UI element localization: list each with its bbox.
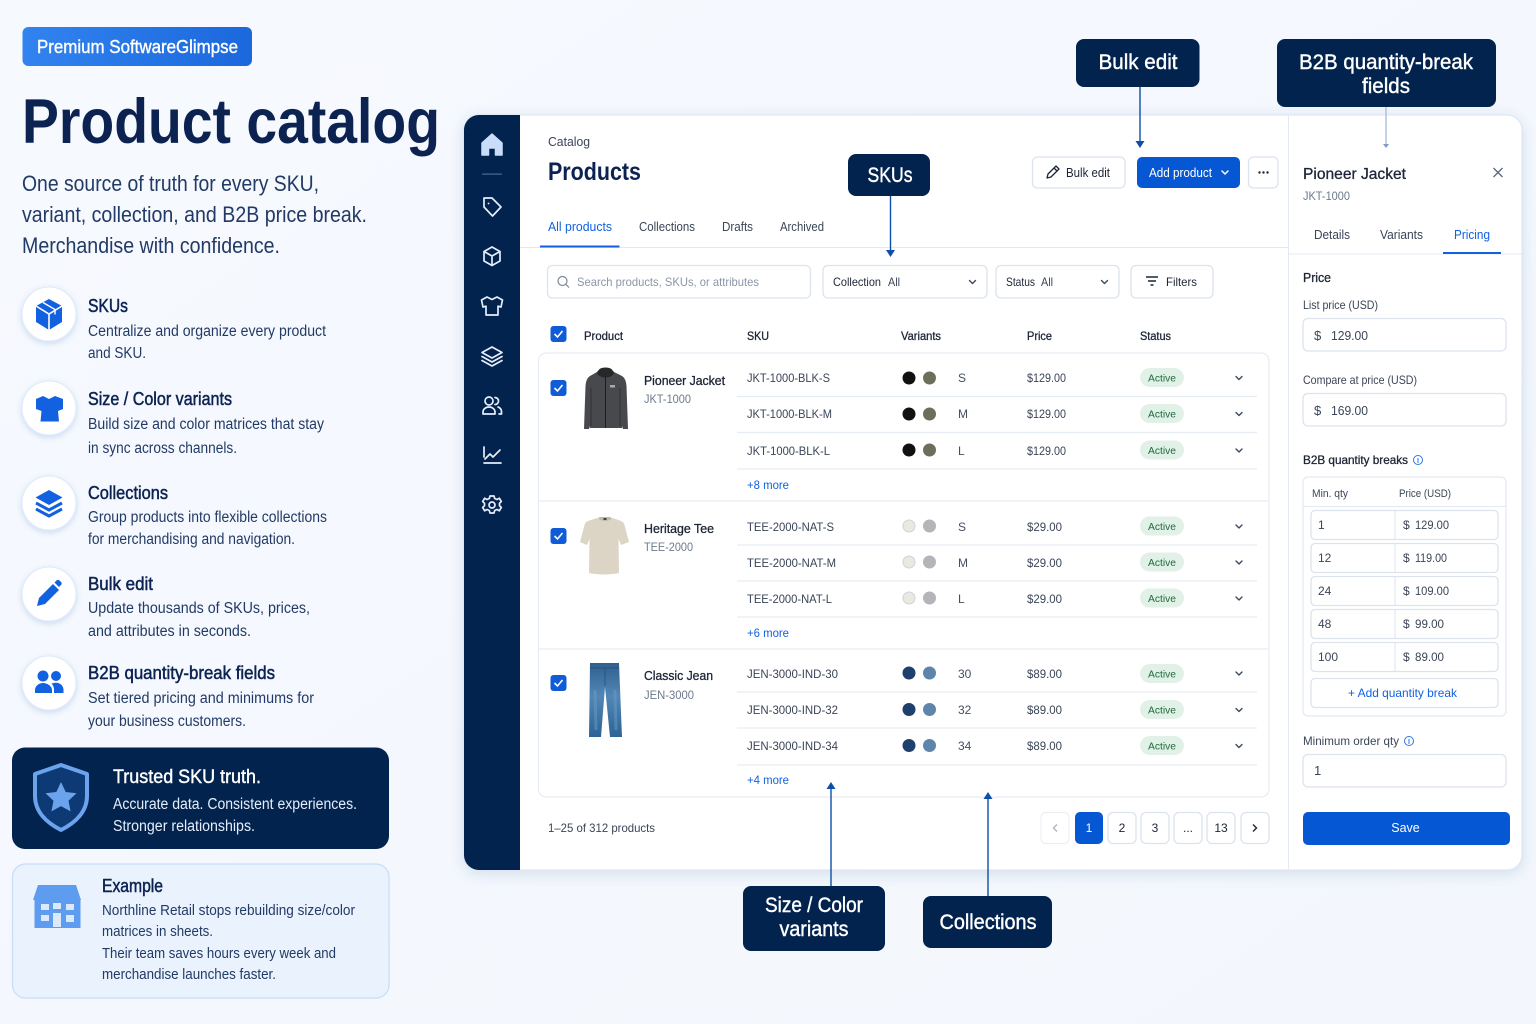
product: Pioneer Jacket: JKT-1000 (644, 392, 691, 406)
icon: shield (35, 765, 87, 830)
variant row: $89.00 (1027, 739, 1062, 753)
tabs: Drafts (722, 220, 753, 234)
product: Pioneer Jacket (550, 368, 1242, 492)
subtitle: variant, collection, and B2B price break. (22, 202, 367, 227)
row: 1 (1318, 518, 1325, 532)
product: Pioneer Jacket: Pioneer Jacket (644, 374, 726, 388)
field: list price: $ (1314, 328, 1322, 343)
variant row: TEE-2000-NAT-S (747, 520, 834, 534)
variant row (747, 700, 1242, 719)
button: save (1303, 812, 1510, 845)
variant row: JEN-3000-IND-34 (747, 739, 838, 753)
quantity break table (1303, 477, 1506, 716)
button: bulk edit (1032, 157, 1125, 188)
panel: trusted SKU truth (12, 748, 389, 849)
arrow: SKUs (886, 196, 895, 257)
callout: Bulk edit (1076, 39, 1200, 87)
tabs: Archived (780, 220, 824, 234)
feature: Size / Color variants: in sync across channels. (88, 440, 237, 457)
subtitle: Merchandise with confidence. (22, 233, 280, 258)
icon: shirt (482, 297, 502, 315)
drawer tabs: Pricing (1454, 228, 1490, 242)
row (1311, 610, 1498, 638)
arrow: Size / Color variants (826, 782, 836, 886)
callout: Size / Color variants (743, 886, 885, 951)
badge: Premium SoftwareGlimpse (22, 27, 252, 66)
row (1311, 510, 1498, 540)
feature: Bulk edit: Update thousands of SKUs, prices, (88, 600, 310, 617)
panel: example: Their team saves hours every week and (102, 945, 336, 962)
subtitle (22, 171, 367, 258)
feature: Size / Color variants (22, 381, 324, 457)
pagination: 1 (1086, 821, 1093, 835)
table header: SKU (747, 329, 769, 343)
callout: SKUs (848, 154, 930, 196)
product: Classic Jean: Classic Jean (644, 669, 713, 683)
tabs (520, 220, 1288, 248)
panel: example: matrices in sheets. (102, 923, 213, 940)
callout: B2B quantity-break fields (1277, 39, 1496, 107)
table header: Product (584, 329, 624, 343)
subtitle: One source of truth for every SKU, (22, 171, 319, 196)
table card (538, 353, 1269, 797)
field: compare at price (1303, 373, 1506, 426)
table header: Status (1140, 329, 1171, 343)
feature: Bulk edit: Bulk edit (88, 574, 153, 594)
button: more (1248, 157, 1278, 188)
icon: analytics (484, 447, 501, 463)
variant row: $129.00 (1027, 407, 1066, 421)
pagination: 1–25 of 312 products (548, 821, 655, 835)
row (1311, 544, 1498, 572)
feature: B2B quantity-break fields (22, 656, 314, 730)
row: 48 (1318, 617, 1332, 631)
variant row (747, 404, 1242, 423)
row: 99.00 (1415, 617, 1444, 631)
icon: close (1494, 168, 1502, 177)
search box: Search products, SKUs, or attributes (577, 275, 759, 289)
feature: Collections: for merchandising and navigation. (88, 531, 295, 548)
page header: Catalog (548, 134, 590, 149)
panel: pricing drawer: JKT-1000 (1303, 189, 1350, 203)
row: $ (1403, 518, 1410, 532)
feature: SKUs: and SKU. (88, 345, 146, 362)
arrow: Bulk edit (1136, 87, 1144, 148)
row: 89.00 (1415, 650, 1444, 664)
variant row: TEE-2000-NAT-M (747, 556, 836, 570)
callout: B2B quantity-break fields: fields (1362, 75, 1410, 98)
variant row: 30 (958, 667, 972, 681)
variant row (747, 664, 1242, 683)
quantity break table: Price (USD) (1399, 488, 1451, 500)
variant row (747, 552, 1242, 572)
variant row: $129.00 (1027, 444, 1066, 458)
row (1311, 576, 1498, 606)
icon: pencil (22, 567, 76, 621)
feature: Collections: Group products into flexible collections (88, 509, 327, 526)
field: list price: 129.00 (1331, 328, 1368, 343)
variant row: Active (1148, 593, 1176, 605)
variant row: $89.00 (1027, 667, 1062, 681)
variant row: JKT-1000-BLK-L (747, 444, 830, 458)
filter: collection: Collection (833, 275, 881, 289)
panel: trusted SKU truth: Trusted SKU truth. (113, 767, 261, 788)
product: Classic Jean: +4 more (747, 773, 789, 787)
feature: Size / Color variants: Size / Color variants (88, 389, 232, 409)
button: add quantity break: + Add quantity break (1348, 686, 1458, 700)
feature: Collections (22, 476, 327, 548)
panel: example (12, 864, 389, 998)
variant row: Active (1148, 521, 1176, 533)
feature: B2B quantity-break fields: your business customers. (88, 713, 246, 730)
pagination (548, 812, 1269, 844)
tabs: Collections (639, 220, 695, 234)
button: add quantity break (1311, 678, 1498, 708)
pagination: 13 (1214, 821, 1228, 835)
variant row: JKT-1000-BLK-M (747, 407, 832, 421)
variant row: $89.00 (1027, 703, 1062, 717)
pagination: 3 (1152, 821, 1159, 835)
row: 12 (1318, 551, 1332, 565)
icon: home (482, 134, 502, 155)
checkbox (550, 380, 566, 396)
image: jacket (584, 368, 628, 429)
row: 24 (1318, 584, 1332, 598)
variant row: Active (1148, 740, 1176, 752)
row: $ (1403, 617, 1410, 631)
feature: B2B quantity-break fields: Set tiered pricing and minimums for (88, 690, 314, 707)
field: minimum order qty: 1 (1314, 763, 1321, 778)
drawer tabs: Variants (1380, 228, 1423, 242)
panel: example: merchandise launches faster. (102, 966, 276, 983)
callout: Bulk edit: Bulk edit (1098, 51, 1178, 74)
sidebar (464, 115, 520, 870)
panel: example: Example (102, 876, 163, 896)
callout: Size / Color variants: variants (780, 918, 848, 941)
icon: layers (482, 347, 502, 366)
product: Heritage Tee: Heritage Tee (644, 522, 714, 536)
arrow: B2B quantity-break fields (1383, 107, 1389, 148)
variant row: L (958, 592, 965, 606)
feature: Bulk edit (22, 567, 310, 640)
icon: gear (483, 496, 501, 513)
callout: Size / Color variants: Size / Color (765, 894, 863, 917)
feature: Size / Color variants: Build size and color matrices that stay (88, 416, 324, 433)
image: jeans (589, 663, 622, 737)
checkbox (550, 528, 566, 544)
table header: Price (1027, 329, 1052, 343)
icon: layers (22, 476, 76, 530)
row (1311, 642, 1498, 672)
page header: Products (548, 158, 641, 186)
filter: status (996, 266, 1119, 298)
callout: SKUs: SKUs (868, 164, 912, 187)
panel: pricing drawer (1288, 116, 1522, 869)
icon: t-shirt (22, 381, 76, 435)
button: filters (1131, 266, 1213, 298)
panel: app window (464, 115, 1522, 870)
product: Classic Jean: JEN-3000 (644, 688, 694, 702)
variant row: S (958, 371, 966, 385)
variant row: Active (1148, 557, 1176, 569)
row: 100 (1318, 650, 1338, 664)
feature: B2B quantity-break fields: B2B quantity-break fields (88, 663, 275, 683)
product: Pioneer Jacket: +8 more (747, 478, 789, 492)
variant row: Active (1148, 372, 1176, 384)
icon: tag (484, 198, 501, 216)
button: add product: Add product (1149, 166, 1212, 180)
field: compare at price: Compare at price (USD) (1303, 373, 1417, 387)
feature: SKUs (22, 287, 327, 362)
button: bulk edit: Bulk edit (1066, 166, 1110, 180)
icon: box (484, 247, 500, 266)
quantity break table: Min. qty (1312, 488, 1348, 500)
product: Heritage Tee (550, 516, 1242, 640)
panel: example: Northline Retail stops rebuilding size/color (102, 902, 355, 919)
button: save: Save (1391, 821, 1420, 835)
icon: box (22, 287, 76, 341)
arrow: Collections (984, 792, 992, 896)
table header: Variants (901, 329, 941, 343)
variant row: Active (1148, 704, 1176, 716)
field: list price (1303, 298, 1506, 351)
variant row: Active (1148, 445, 1176, 457)
filter: status: All (1041, 275, 1053, 289)
heading: B2B quantity breaks: B2B quantity breaks (1303, 453, 1408, 467)
row: 129.00 (1415, 518, 1449, 532)
icon: store (33, 885, 81, 928)
filter: collection: All (888, 275, 900, 289)
variant row (747, 736, 1242, 755)
variant row: Active (1148, 408, 1176, 420)
search box (548, 266, 810, 298)
tabs: All products (548, 220, 612, 234)
drawer tabs (1289, 228, 1522, 254)
panel: pricing drawer: Price (1303, 271, 1331, 285)
pagination: ... (1183, 821, 1193, 835)
panel: trusted SKU truth: Accurate data. Consistent experiences. (113, 796, 357, 813)
field: minimum order qty: Minimum order qty (1303, 734, 1399, 748)
variant row: S (958, 520, 966, 534)
page header (548, 134, 641, 186)
product: Classic Jean (550, 663, 1242, 787)
variant row: M (958, 407, 968, 421)
callout: Collections (923, 896, 1052, 948)
icon: users (483, 397, 502, 414)
feature: SKUs: SKUs (88, 296, 128, 316)
feature: SKUs: Centralize and organize every product (88, 323, 327, 340)
variant row (747, 440, 1242, 460)
title: Product catalog (22, 87, 440, 157)
variant row: JEN-3000-IND-30 (747, 667, 838, 681)
field: list price: List price (USD) (1303, 298, 1378, 312)
variant row (747, 516, 1242, 536)
button: add product (1137, 157, 1240, 188)
panel: trusted SKU truth: Stronger relationships. (113, 818, 255, 835)
variant row: JEN-3000-IND-32 (747, 703, 838, 717)
variant row: $129.00 (1027, 371, 1066, 385)
variant row: Active (1148, 668, 1176, 680)
product: Heritage Tee: +6 more (747, 626, 789, 640)
product: Heritage Tee: TEE-2000 (644, 540, 693, 554)
variant row: M (958, 556, 968, 570)
variant row: L (958, 444, 965, 458)
panel: pricing drawer: Pioneer Jacket (1303, 166, 1407, 183)
feature: Bulk edit: and attributes in seconds. (88, 623, 251, 640)
row: $ (1403, 584, 1410, 598)
variant row (747, 588, 1242, 608)
checkbox (550, 675, 566, 691)
table header (550, 326, 1171, 343)
variant row: JKT-1000-BLK-S (747, 371, 830, 385)
pagination: 2 (1119, 821, 1126, 835)
row: 109.00 (1415, 584, 1449, 598)
field: compare at price: $ (1314, 403, 1322, 418)
callout: Collections: Collections (940, 911, 1036, 934)
field: compare at price: 169.00 (1331, 403, 1368, 418)
variant row: $29.00 (1027, 556, 1062, 570)
variant row: TEE-2000-NAT-L (747, 592, 832, 606)
row: 119.00 (1415, 551, 1447, 565)
variant row (747, 368, 1242, 387)
icon: users (22, 656, 76, 710)
variant row: $29.00 (1027, 520, 1062, 534)
variant row: 32 (958, 703, 972, 717)
image: tee (580, 517, 629, 574)
variant row: $29.00 (1027, 592, 1062, 606)
filter: status: Status (1006, 275, 1035, 289)
field: minimum order qty (1303, 734, 1506, 787)
feature: Collections: Collections (88, 483, 168, 503)
variant row: 34 (958, 739, 972, 753)
row: $ (1403, 650, 1410, 664)
drawer tabs: Details (1314, 228, 1350, 242)
filter: collection (823, 266, 987, 298)
button: filters: Filters (1166, 275, 1197, 289)
checkbox: select all (550, 326, 566, 342)
row: $ (1403, 551, 1410, 565)
badge: Premium SoftwareGlimpse: Premium SoftwareGlimpse (37, 37, 238, 57)
callout: B2B quantity-break fields: B2B quantity-break (1299, 51, 1473, 74)
